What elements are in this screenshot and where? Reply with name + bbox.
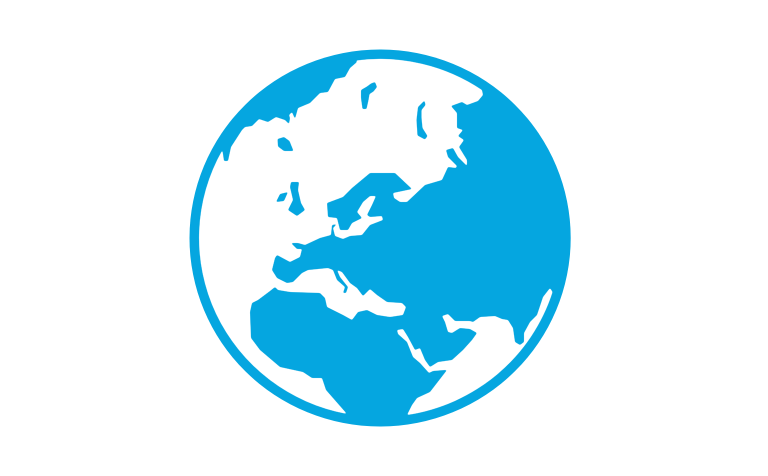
ocean: Atlantic, Arctic and Mediterranean — [199, 59, 483, 414]
island: Iceland — [278, 137, 294, 151]
globe disc and outer ring — [190, 50, 571, 426]
island: Svalbard — [361, 82, 377, 109]
island: Ireland — [276, 192, 288, 202]
ocean: Indian Ocean and Red Sea — [397, 288, 553, 415]
island: Novaya Zemlya — [416, 100, 428, 140]
island: Great Britain — [288, 182, 305, 216]
